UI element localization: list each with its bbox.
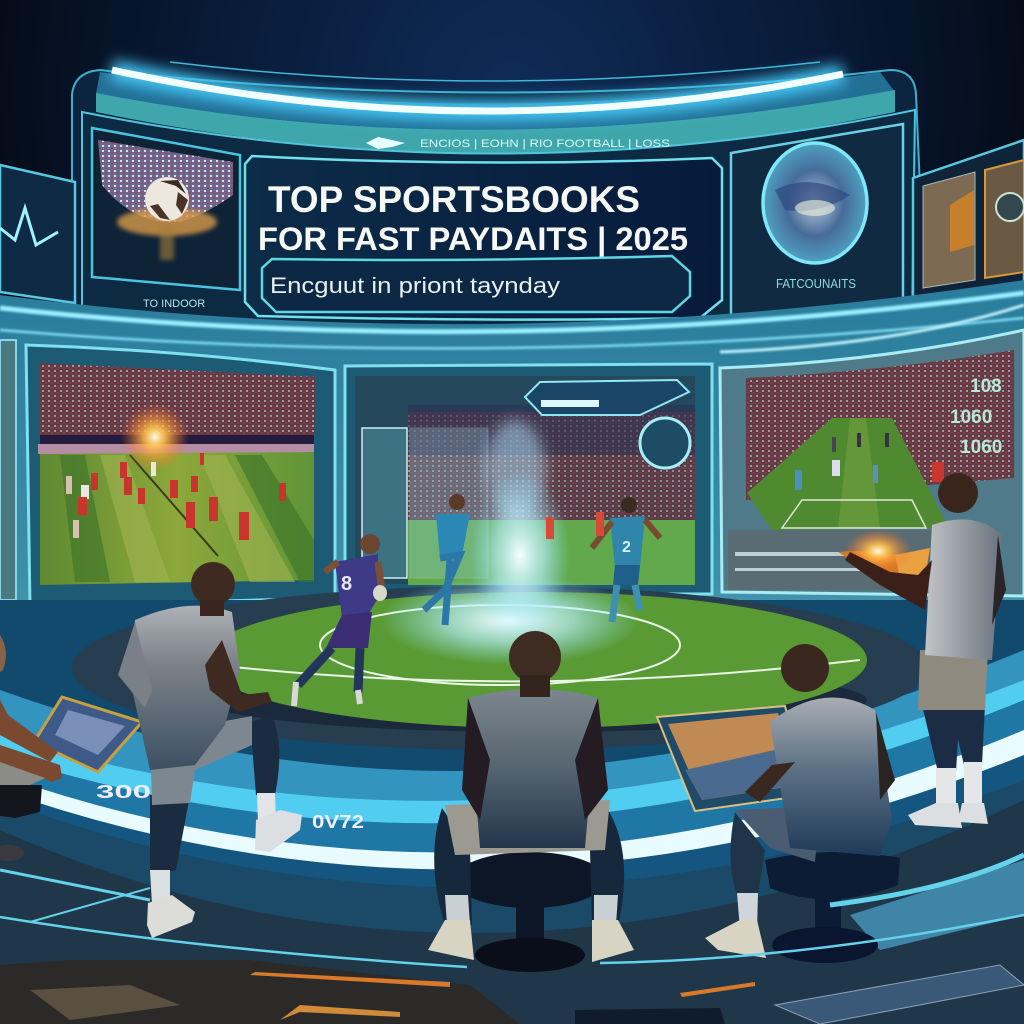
small header text: ENCIOS | EOHN | RIO FOOTBALL | LOSS [420, 138, 670, 150]
panel: right match screen [720, 330, 1024, 596]
icon: double arrow [366, 137, 405, 149]
stool: centre [454, 852, 606, 972]
cyan strip [0, 600, 1024, 823]
head [938, 473, 978, 513]
dark band [0, 600, 1024, 888]
lower console [728, 530, 943, 590]
small red players [546, 512, 604, 539]
debris: metal sheet [575, 965, 1024, 1024]
chart line [0, 208, 58, 245]
heading line 1: TOP SPORTSBOOKS [268, 179, 640, 220]
glass band [0, 280, 1024, 700]
right tablet [657, 706, 808, 811]
pitch [747, 418, 949, 530]
hologram beam [470, 470, 570, 640]
platform layers [0, 600, 1024, 933]
shorts [445, 800, 610, 855]
head [781, 644, 829, 692]
heading line 2: FOR FAST PAYDAITS | 2025 [258, 221, 688, 257]
lens circle [640, 418, 690, 468]
back ring around pitch [72, 586, 928, 750]
crowd [408, 412, 695, 522]
leg [730, 812, 765, 895]
legs [434, 805, 624, 925]
shirt [925, 519, 1002, 660]
shirt [468, 689, 598, 848]
panel: globe screen [731, 124, 903, 320]
players in red [66, 453, 286, 540]
hologram glow [380, 575, 640, 665]
panel: soccer ball screen [92, 128, 240, 310]
teal strip [96, 90, 895, 154]
panel: upper curved screen frame [72, 62, 925, 334]
sun flare [121, 403, 189, 471]
arms [462, 698, 608, 820]
subtitle box: Encguut in priont taynday [270, 273, 560, 298]
stool: right [765, 852, 900, 963]
person: centre seated [428, 631, 634, 962]
person: left standing with raised leg [118, 562, 302, 938]
arm [845, 552, 932, 610]
icon: globe [763, 143, 867, 263]
platform text row [96, 782, 364, 832]
centre pitch [408, 520, 695, 585]
outer face [0, 600, 1024, 933]
glowing open book [838, 529, 930, 585]
grass [40, 452, 314, 585]
dark strip [0, 600, 1024, 771]
sub-screen with emblem [985, 160, 1024, 278]
subtitle box [262, 256, 690, 312]
left tablet [34, 697, 142, 772]
head [509, 631, 561, 683]
person: right seated [705, 644, 895, 958]
panel: left match screen [26, 345, 335, 606]
field players [795, 433, 944, 490]
text row [0, 600, 1024, 853]
panel: left edge sliver [0, 340, 16, 600]
floor highlight right [850, 860, 1024, 950]
crowd [746, 350, 1014, 500]
panel: far right screens [913, 140, 1024, 300]
icon: soccer ball [145, 177, 189, 221]
person: right standing [845, 473, 1006, 828]
caption: FATCOUNAITS [776, 276, 856, 291]
top display [525, 380, 689, 415]
arm [205, 640, 272, 712]
mid strip [0, 600, 1024, 801]
panel: title board [245, 156, 722, 320]
panel: right match screen: 1060 [950, 407, 992, 428]
person: far left edge [0, 635, 62, 861]
sub-screen [923, 172, 975, 288]
crowd [40, 363, 316, 440]
player: blue left [424, 494, 470, 625]
shorts [150, 716, 252, 805]
debris: money pile [0, 960, 520, 1024]
blue band under glow [96, 72, 895, 131]
white band [0, 600, 1024, 870]
glowing band lines [0, 293, 1024, 352]
side numbers: 108 [970, 376, 1002, 397]
shorts [735, 806, 820, 862]
thin upper arc [170, 62, 820, 81]
player: purple number 8 [294, 534, 387, 706]
circular pitch [203, 470, 867, 732]
player: blue right number 2 [592, 497, 660, 622]
platform text row: 0V72 [312, 812, 364, 832]
floor [0, 760, 1024, 1024]
panel: centre match screen [345, 364, 712, 594]
holo panels [362, 428, 407, 578]
grass stripes [100, 455, 295, 582]
shirt [770, 698, 892, 856]
shirt [130, 606, 240, 770]
platform text row: 300 [96, 782, 151, 802]
panel: right match screen: 1060 [960, 437, 1002, 458]
arm [745, 762, 795, 802]
head [191, 562, 235, 606]
glowing top bar [112, 70, 843, 111]
player: blue right number 2: 2 [622, 539, 631, 556]
raised leg [248, 716, 279, 795]
standing leg [150, 795, 190, 875]
floor lines [0, 855, 1024, 967]
hologram player [485, 420, 545, 520]
shorts [918, 650, 988, 710]
dark inner panel [82, 110, 915, 334]
panel: far left chart screen [0, 165, 75, 303]
caption: TO INDOOR [143, 298, 205, 310]
legs [922, 705, 985, 772]
player: purple number 8: 8 [341, 573, 352, 595]
